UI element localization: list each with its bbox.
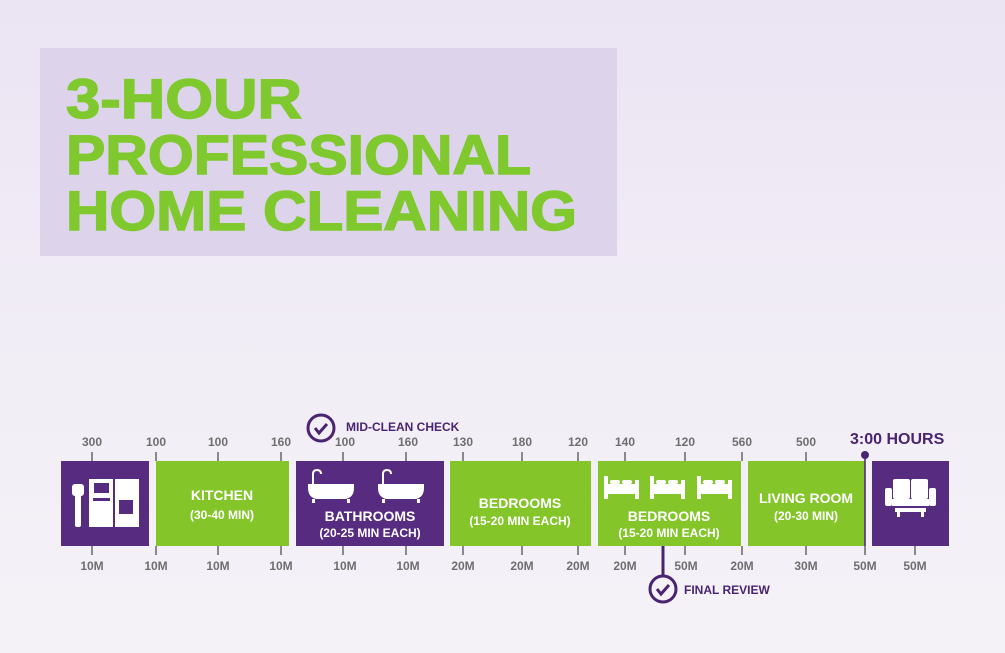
box: living room: LIVING ROOM	[759, 490, 853, 506]
top tick labels: 300	[82, 435, 102, 449]
box: living room: (20-30 MIN)	[774, 509, 838, 523]
title: PROFESSIONAL	[66, 123, 531, 186]
bottom tick labels: 10M	[144, 559, 168, 573]
bottom tick labels: 10M	[80, 559, 104, 573]
callout: final review	[650, 546, 770, 602]
box: kitchen icon	[61, 461, 149, 546]
top tick labels	[82, 435, 816, 449]
bottom tick labels: 20M	[730, 559, 754, 573]
box: bedrooms 2: (15-20 MIN EACH)	[618, 526, 720, 540]
icon: bathtubs	[308, 470, 424, 503]
box: bedrooms 1: (15-20 MIN EACH)	[469, 514, 571, 528]
title: 3-HOUR	[66, 67, 302, 130]
box: bedrooms 1	[450, 461, 591, 546]
top tick labels: 100	[146, 435, 166, 449]
box: living room	[748, 461, 865, 546]
callout: 3:00 hours	[850, 431, 945, 546]
bottom tick labels: 10M	[206, 559, 230, 573]
title: HOME CLEANING	[66, 179, 577, 242]
icon: fork and fridge	[72, 479, 139, 527]
bottom tick labels: 30M	[794, 559, 818, 573]
bottom tick labels: 50M	[903, 559, 927, 573]
top tick labels: 560	[732, 435, 752, 449]
top tick labels: 160	[271, 435, 291, 449]
box: bedrooms 1: BEDROOMS	[479, 495, 561, 511]
bottom tick labels: 20M	[451, 559, 475, 573]
top tick labels: 120	[675, 435, 695, 449]
top tick labels: 130	[453, 435, 473, 449]
callout: mid-clean check: MID-CLEAN CHECK	[346, 420, 460, 434]
top tick labels: 180	[512, 435, 532, 449]
bottom tick labels: 20M	[613, 559, 637, 573]
top tick labels: 140	[615, 435, 635, 449]
top tick labels: 160	[398, 435, 418, 449]
box: kitchen: KITCHEN	[191, 487, 253, 503]
top tick labels: 100	[208, 435, 228, 449]
bottom tick labels: 20M	[566, 559, 590, 573]
box: kitchen	[156, 461, 289, 546]
bottom tick labels: 50M	[853, 559, 877, 573]
callout: mid-clean check	[308, 415, 460, 441]
bottom tick labels: 20M	[510, 559, 534, 573]
box: kitchen: (30-40 MIN)	[190, 508, 254, 522]
callout: 3:00 hours: 3:00 HOURS	[850, 431, 945, 448]
box: bathrooms: BATHROOMS	[325, 508, 415, 524]
top tick labels: 120	[568, 435, 588, 449]
icon: sofa	[885, 479, 936, 517]
box: sofa icon	[872, 461, 949, 546]
title	[66, 67, 577, 242]
title panel	[40, 48, 617, 256]
callout: final review: FINAL REVIEW	[684, 583, 770, 597]
bottom tick labels: 10M	[396, 559, 420, 573]
bottom tick labels: 10M	[269, 559, 293, 573]
bottom tick labels: 10M	[333, 559, 357, 573]
icon: beds	[604, 476, 732, 499]
top tick labels: 100	[335, 435, 355, 449]
box: bedrooms 2: BEDROOMS	[628, 508, 710, 524]
bottom tick labels	[80, 559, 927, 573]
bottom tick labels: 50M	[674, 559, 698, 573]
box: bedrooms 2	[598, 461, 741, 546]
box: bathrooms: (20-25 MIN EACH)	[319, 526, 421, 540]
box: bathrooms	[296, 461, 444, 546]
top tick labels: 500	[796, 435, 816, 449]
